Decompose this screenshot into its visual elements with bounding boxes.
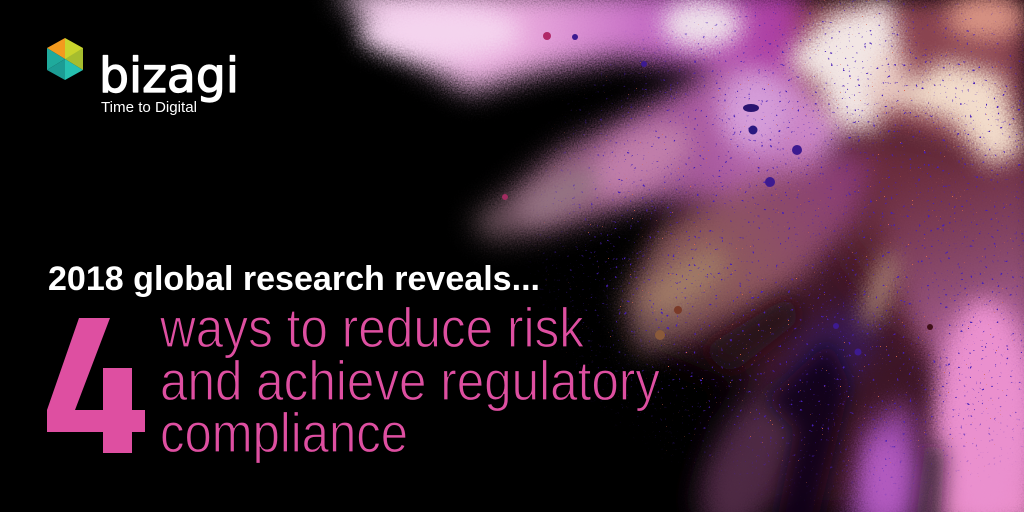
powder: violet and orange specks — [526, 0, 1024, 505]
heading: 2018 global research reveals... — [48, 260, 540, 298]
powder: main plumes — [335, 0, 1024, 512]
powder: soft dark base — [640, 0, 1024, 512]
powder: dark gaps — [700, 295, 945, 512]
icon: hexagon cube — [47, 38, 83, 80]
headline line 1: ways to reduce risk — [159, 296, 585, 359]
logo — [47, 38, 239, 116]
powder explosion photo — [335, 0, 1024, 512]
headline — [159, 296, 660, 464]
headline line 2: and achieve regulatory — [160, 349, 660, 412]
wordmark: bizagi — [99, 48, 239, 104]
big number 4 — [47, 318, 145, 453]
tagline: Time to Digital — [101, 99, 197, 116]
powder: large chunks — [502, 32, 933, 356]
powder: bright highlights — [360, 0, 1024, 512]
headline line 3: compliance — [160, 401, 408, 464]
